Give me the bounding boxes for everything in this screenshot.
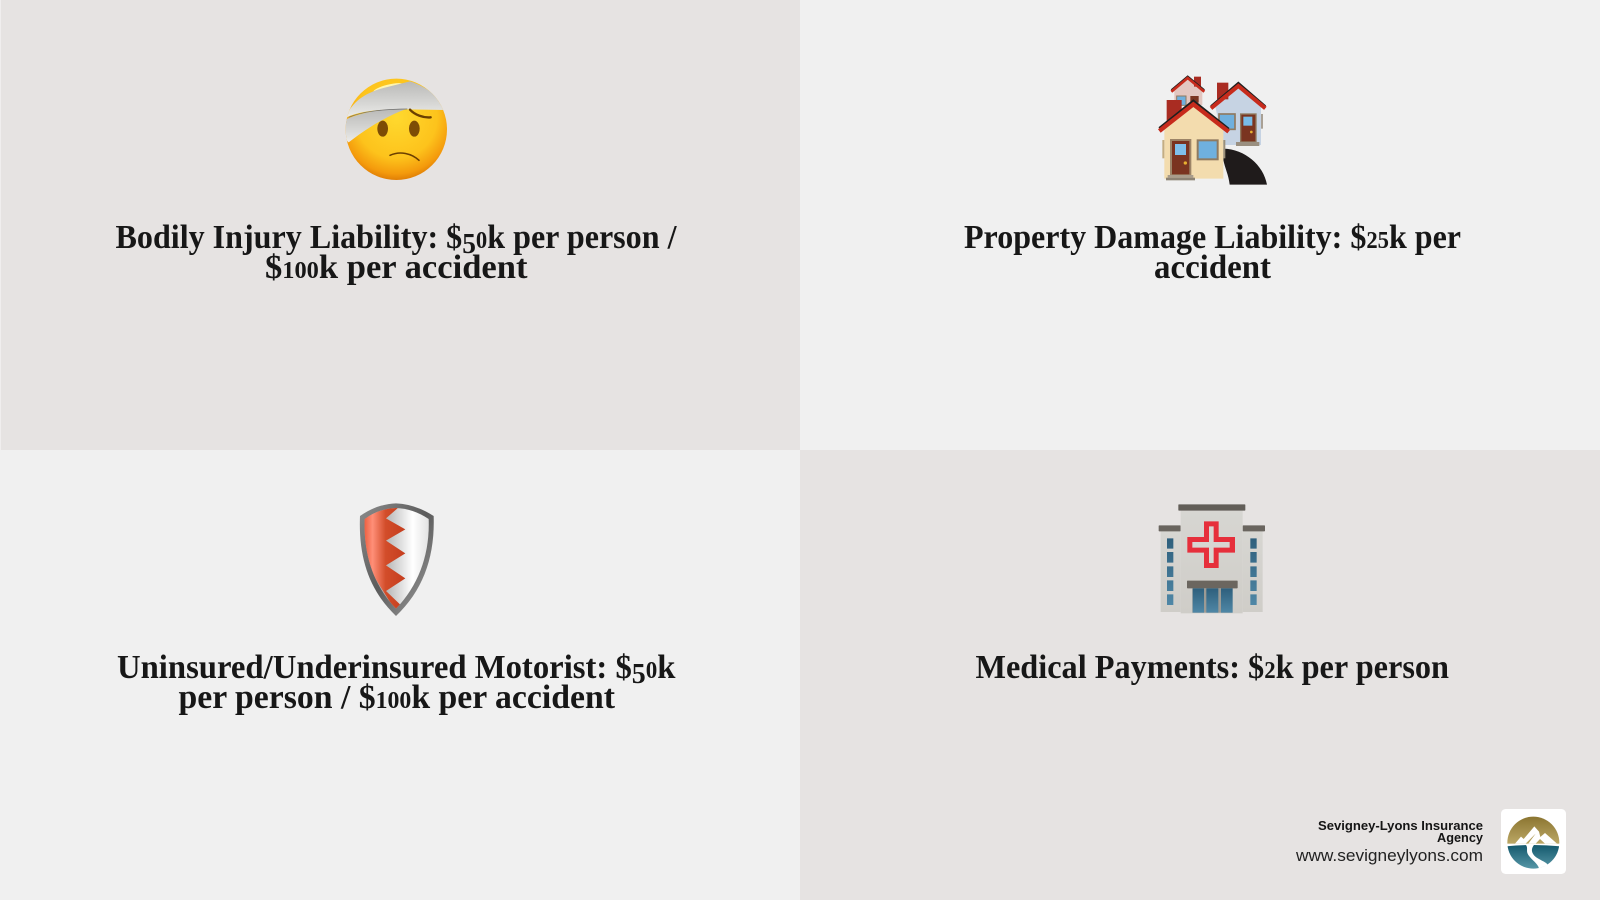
heading: uninsured motorist: k xyxy=(657,649,676,686)
panel: uninsured motorist xyxy=(118,503,676,715)
agency name and website: www.sevigneylyons.com xyxy=(1295,847,1483,865)
icon: houses xyxy=(1159,76,1267,185)
icon: hospital xyxy=(1159,504,1265,613)
heading: uninsured motorist: Uninsured/Underinsured Motorist: $ xyxy=(117,649,652,686)
heading: property damage xyxy=(964,219,1461,286)
agency name and website xyxy=(1295,819,1483,865)
heading: bodily injury: k per person / xyxy=(487,219,688,256)
heading: uninsured motorist: 5 xyxy=(632,658,646,690)
logo: mountains and river xyxy=(1501,809,1566,874)
agency name and website: Agency xyxy=(1437,831,1483,845)
heading: bodily injury: Bodily Injury Liability: $ xyxy=(116,219,483,256)
heading: property damage: Property Damage Liability: $25k per xyxy=(964,219,1461,256)
heading: bodily injury: $100k per accident xyxy=(265,249,528,286)
agency name and website: Sevigney-Lyons Insurance xyxy=(1318,819,1483,833)
heading: bodily injury: 5 xyxy=(462,228,476,260)
panel: medical payments xyxy=(800,450,1600,900)
heading: medical payments: Medical Payments: $2k per person xyxy=(976,649,1449,686)
icon: shield xyxy=(360,503,434,616)
heading: bodily injury xyxy=(116,219,677,286)
heading: uninsured motorist: 0 xyxy=(646,658,657,684)
panel: property damage liability xyxy=(800,0,1600,450)
heading: uninsured motorist xyxy=(117,649,676,716)
heading: bodily injury: 0 xyxy=(476,228,487,254)
heading: uninsured motorist: per person / $100k per accident xyxy=(178,679,616,716)
icon: face with head bandage xyxy=(344,79,447,180)
panel: bodily injury liability xyxy=(0,0,800,450)
heading: property damage: accident xyxy=(1154,249,1272,286)
